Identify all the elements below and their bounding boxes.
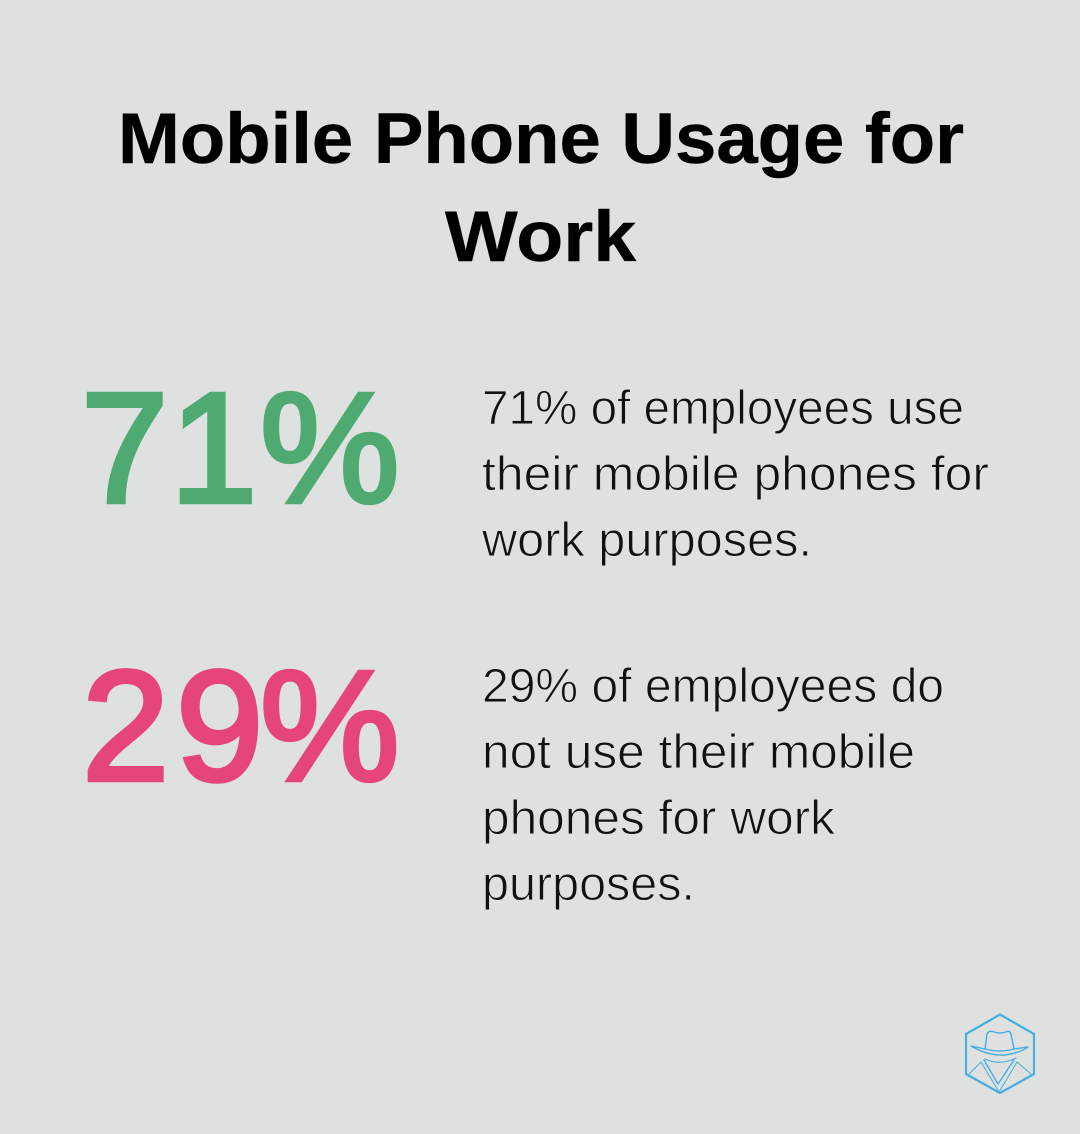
title: Mobile Phone Usage for	[118, 100, 964, 179]
title	[118, 100, 964, 277]
title: Work	[445, 198, 637, 277]
statistic: 71%: 71%	[81, 361, 400, 536]
description: 29% of employees: purposes.	[482, 858, 695, 911]
description: 71% of employees: 71% of employees use	[482, 382, 964, 435]
description: 29% of employees: not use their mobile	[482, 726, 915, 779]
description: 29% of employees	[482, 660, 944, 911]
statistic: 29%: 29%	[82, 639, 400, 814]
icon: hexagon logo with hat	[966, 1014, 1034, 1093]
description: 29% of employees: phones for work	[482, 792, 836, 845]
description: 29% of employees: 29% of employees do	[482, 660, 944, 713]
description: 71% of employees: their mobile phones for	[482, 448, 989, 501]
description: 71% of employees	[481, 382, 989, 567]
description: 71% of employees: work purposes.	[481, 514, 812, 567]
